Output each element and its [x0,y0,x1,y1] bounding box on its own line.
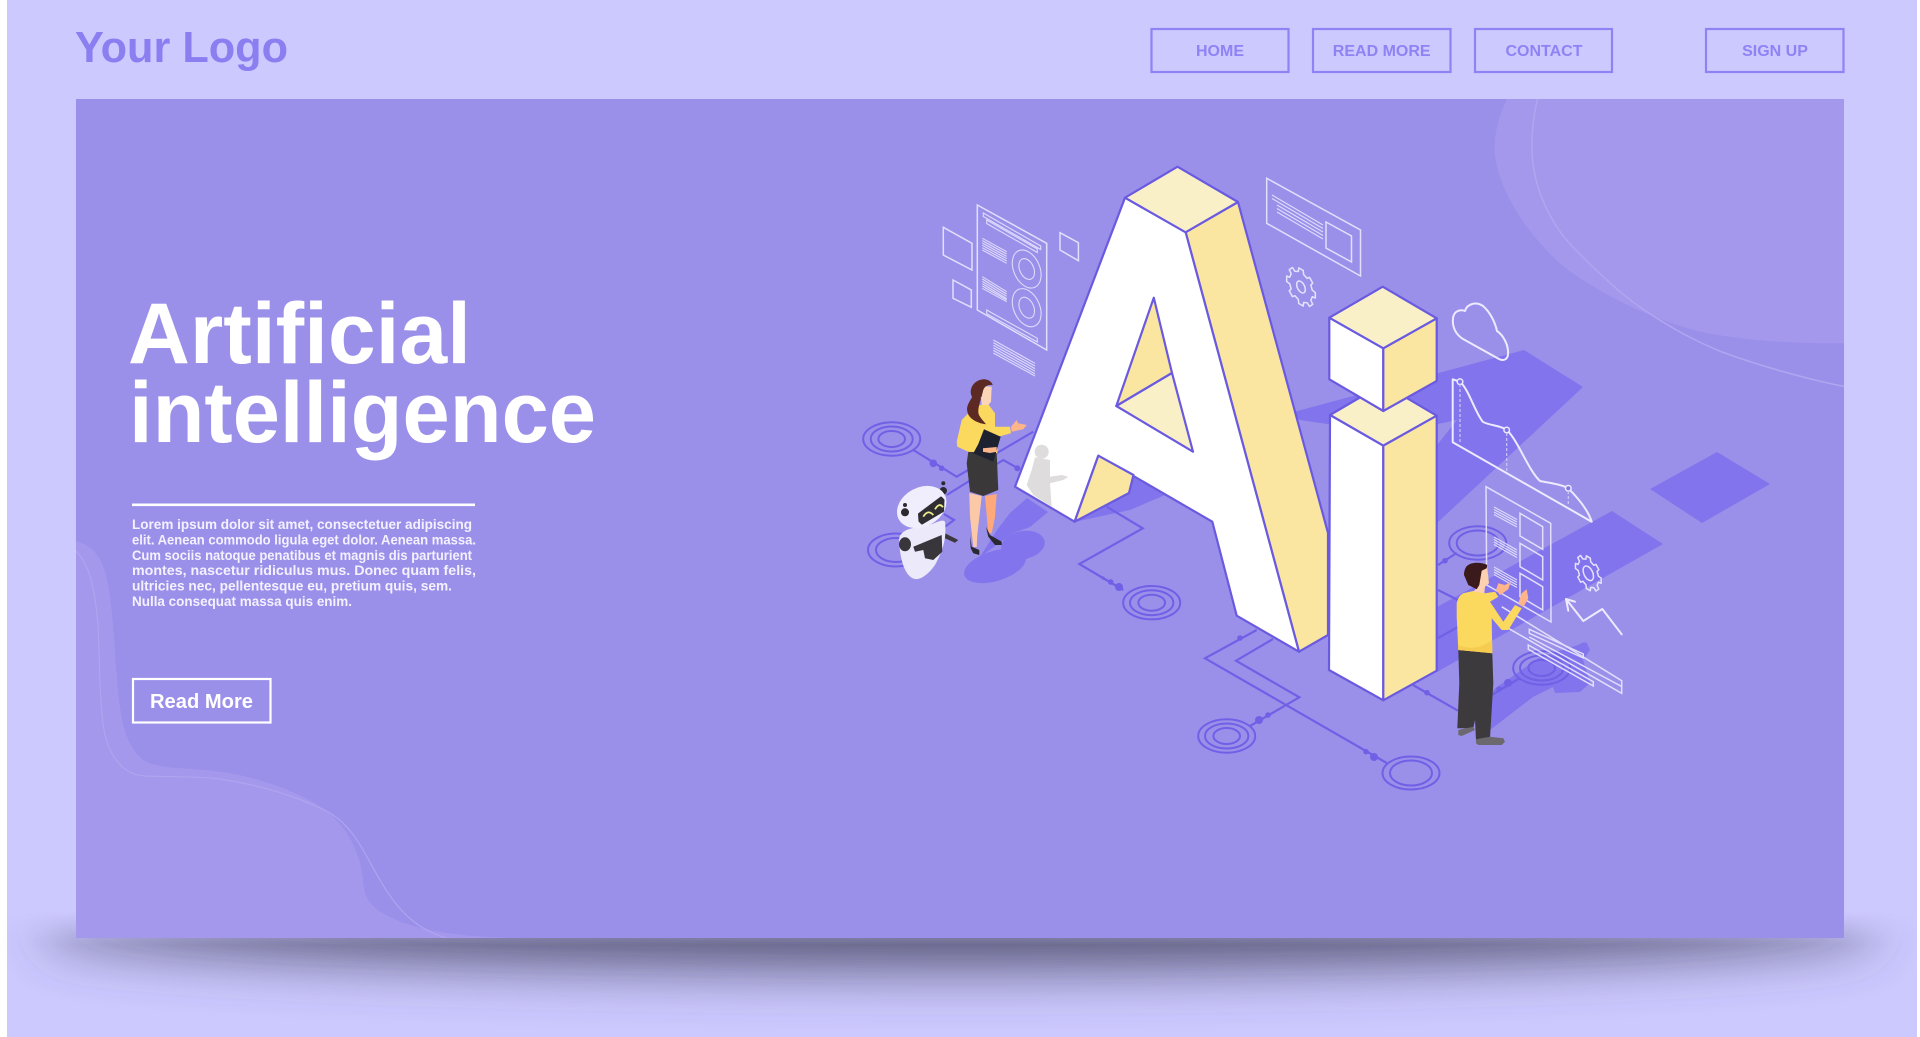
read more button: Read More [150,691,253,713]
body copy: elit. Aenean commodo ligula eget dolor. Aenean massa. [132,532,476,548]
man sweater [1457,591,1522,653]
robot arm far [945,533,958,543]
wireframe: form card [1486,487,1551,622]
woman sweater [957,404,1011,453]
heading: intelligence [129,365,596,461]
heading [128,286,596,461]
man face [1473,568,1489,593]
i stem top [1330,384,1437,446]
woman's silhouette on A [1027,445,1068,507]
letter i [1329,287,1437,700]
nav button: read more [1313,29,1450,72]
man hair [1464,563,1487,589]
robot head [890,478,954,536]
woman face [981,386,992,405]
nav button: sign up [1706,29,1844,72]
i dot front [1329,318,1383,411]
read more button [133,679,270,722]
woman skirt [967,452,998,496]
man hands [1496,582,1528,607]
body copy: Nulla consequat massa quis enim. [132,594,352,609]
robot antenna [940,481,947,494]
woman shoes [970,536,979,555]
robot eyes [923,505,943,517]
hero panel [76,99,1847,938]
circuit targets [863,422,1570,790]
icon: gear bottom [1575,550,1601,597]
i stem front [1329,415,1383,700]
body copy: montes, nascetur ridiculus mus. Donec quam felis, [132,563,476,578]
nav button: read more: READ MORE [1333,43,1431,60]
woman hands [983,420,1027,453]
figure: woman [957,379,1027,555]
man sweater shade [1458,640,1492,653]
heading: Artificial [128,286,471,382]
A counter yellow wall [1116,298,1172,406]
i dot side [1383,318,1437,411]
nav button: home: HOME [1196,43,1244,60]
letter A [1015,167,1328,652]
navigation bar [1152,29,1844,72]
icon: cloud [1453,304,1508,360]
woman hair [971,379,993,399]
robot body [899,521,945,579]
robot left arm [899,537,911,551]
woman legs [969,493,982,547]
body copy [132,517,476,609]
A right side face [1186,202,1328,652]
line chart wireframe [1453,379,1592,522]
woman ponytail [967,392,986,424]
wireframe: text stripes [993,340,1035,376]
body copy: Lorem ipsum dolor sit amet, consectetuer adipiscing [132,517,472,532]
panel shadow [35,883,1885,967]
isometric illustration [863,167,1770,789]
i dot top [1329,287,1437,348]
figure: robot [890,478,958,579]
body copy: Cum sociis natoque penatibus et magnis dis parturient [132,548,472,563]
divider [132,504,475,506]
wireframe: report with rings [977,205,1047,350]
A front face [1015,198,1299,652]
icon: gear top [1287,261,1315,313]
circuit lines [913,432,1520,763]
A counter cream floor [1116,373,1193,452]
nav button: contact [1475,29,1612,72]
man trousers [1457,650,1493,740]
figure: man [1457,563,1528,745]
logo: Your Logo [75,23,288,72]
man shoes [1458,727,1505,745]
wireframe: long stripes [1502,607,1622,693]
nav button: sign up: SIGN UP [1742,43,1808,60]
icon: trend arrow [1566,599,1622,634]
nav button: home [1152,29,1288,72]
A top face [1125,167,1238,232]
cast shadows [960,350,1770,730]
woman tablet [973,429,1001,462]
nav button: contact: CONTACT [1505,43,1583,60]
wireframe: small squares [943,227,1078,307]
robot ear [901,503,909,516]
decorative blobs [76,99,1847,938]
body copy: ultricies nec, pellentesque eu, pretium quis, sem. [132,578,452,594]
robot chest [913,535,942,560]
robot face [919,498,944,524]
wireframe: browser card [1267,178,1360,276]
i stem side [1383,416,1437,700]
A notch wall [1075,456,1134,522]
